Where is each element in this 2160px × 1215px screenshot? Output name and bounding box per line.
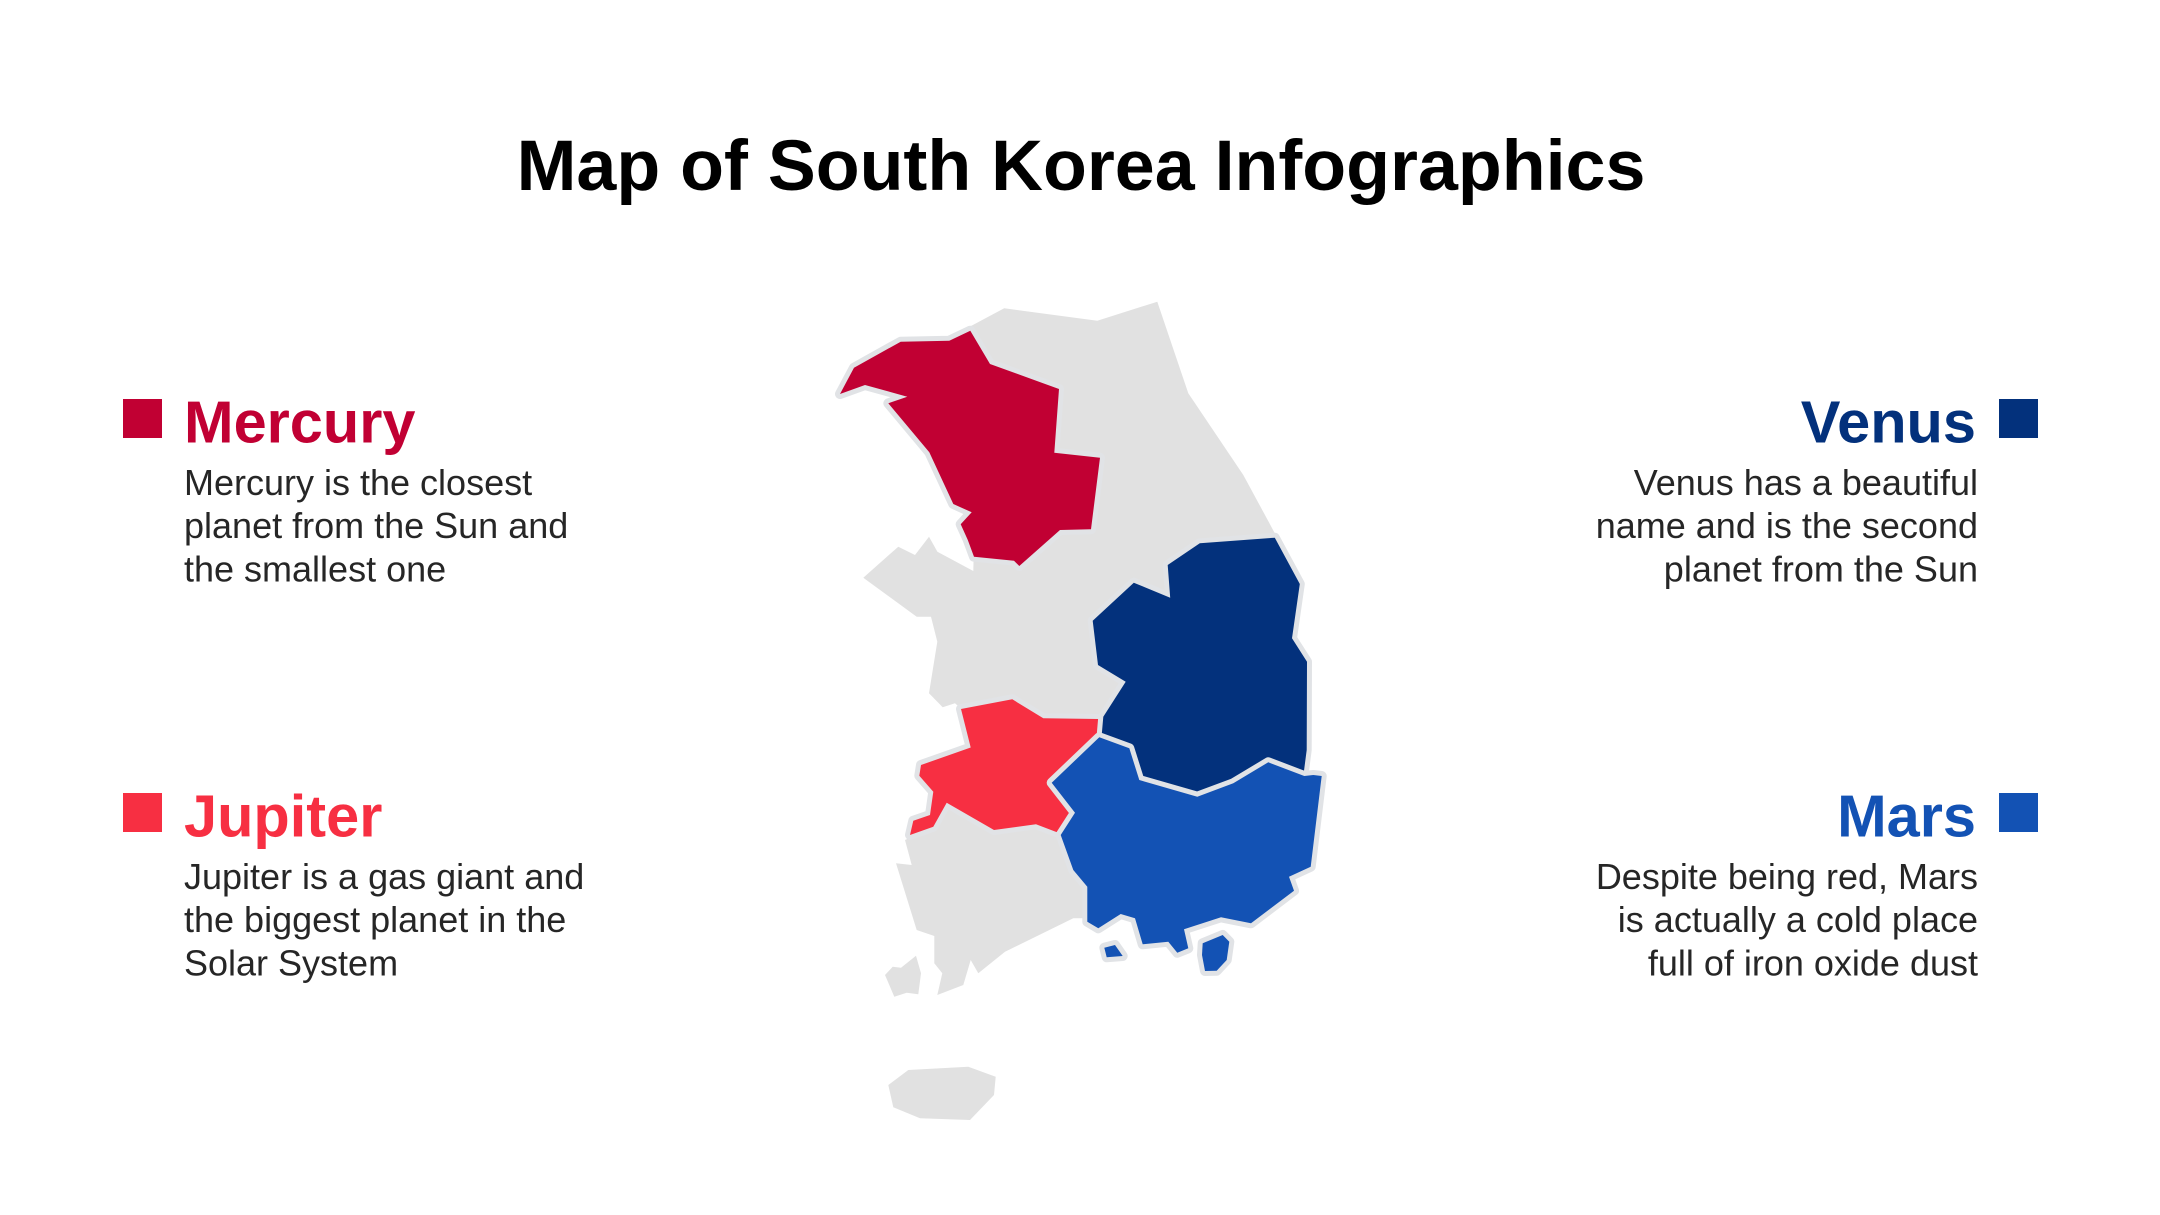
map region: grey south-west islet <box>885 956 921 997</box>
map region: grey mainland <box>863 302 1295 995</box>
text: Mercury description: planet from the Sun and <box>184 505 568 546</box>
marker: Venus <box>1999 399 2038 438</box>
heading: Jupiter: Jupiter <box>184 782 382 850</box>
map region: Jeju island <box>888 1067 996 1120</box>
text: Mars description: is actually a cold place <box>1618 899 1978 940</box>
marker: Mars <box>1999 793 2038 832</box>
text: Jupiter description: the biggest planet in the <box>184 899 566 940</box>
panel: Mars <box>1596 782 2038 983</box>
map region: Mercury crimson <box>840 331 1100 566</box>
panel: Mercury <box>123 388 568 589</box>
text: Jupiter description: Jupiter is a gas giant and <box>184 856 584 897</box>
title: Map of South Korea Infographics <box>517 126 1645 206</box>
heading: Mars: Mars <box>1837 782 1976 850</box>
map region: Jupiter red <box>910 699 1098 835</box>
text: Mercury description: Mercury is the closest <box>184 462 532 503</box>
map region: Venus navy <box>1093 538 1307 795</box>
text: Venus description: Venus has a beautiful <box>1634 462 1978 503</box>
text: Mars description: Despite being red, Mars <box>1596 856 1978 897</box>
map of South Korea <box>840 302 1322 1120</box>
text: Mars description: full of iron oxide dust <box>1648 942 1978 983</box>
text: Venus description: planet from the Sun <box>1664 548 1978 589</box>
text: Venus description: name and is the second <box>1596 505 1978 546</box>
text: Mercury description: the smallest one <box>184 548 446 589</box>
panel: Venus <box>1596 388 2038 589</box>
panel: Jupiter <box>123 782 584 983</box>
heading: Mercury: Mercury <box>184 388 416 456</box>
marker: Jupiter <box>123 793 162 832</box>
marker: Mercury <box>123 399 162 438</box>
heading: Venus: Venus <box>1801 388 1976 456</box>
text: Jupiter description: Solar System <box>184 942 398 983</box>
map region: Mars blue <box>1052 737 1322 971</box>
